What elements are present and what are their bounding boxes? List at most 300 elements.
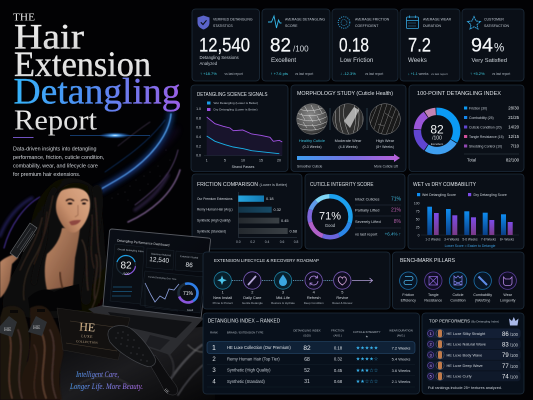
panel: morphology study: More Cuticle Lift (374, 164, 398, 168)
row 2: Remy Human Hair (Top Tier) (227, 356, 280, 361)
KPI card: verified statistics: Detangling Sessions (200, 55, 239, 60)
row 4: ★★☆☆☆ (356, 379, 379, 385)
screen ring (116, 256, 136, 274)
panel: wet vs dry combability: Lower Score = Easier to Detangle (445, 244, 496, 248)
roadmap node: new install: New Install (213, 295, 232, 300)
panel: friction comparison: 0.8 (294, 240, 298, 244)
hair brush: HE (163, 387, 171, 395)
intro paragraph: Data-driven insights into detangling (13, 146, 97, 152)
panel: benchmark pillars: BENCHMARK PILLARS (400, 258, 456, 264)
axes: 5 (224, 158, 226, 162)
row 3: Synthetic (High Quality) (227, 368, 271, 373)
panel: wet vs dry combability: 0 (418, 234, 420, 238)
axes: 1.0 (196, 107, 201, 111)
panel: top performers: Full rankings include 25+ textures analyzed. (428, 386, 502, 390)
table header: BRAND / EXTENSION TYPE (227, 330, 263, 334)
legend rows: Combability (25) (469, 116, 494, 120)
laptop (88, 229, 211, 355)
row 1: 7.2 Weeks (392, 346, 410, 350)
title: Detangling (14, 70, 181, 112)
luxe product box (57, 308, 130, 360)
KPI card: wear duration: AVERAGE WEAR (423, 18, 452, 22)
integrity rows: 8% (394, 219, 402, 225)
panel: friction comparison: 0.45 (281, 218, 289, 223)
KPI card: friction coefficient: ↓ -12.3% (340, 71, 356, 76)
KPI card: satisfaction: vs last report (492, 72, 510, 76)
performer row 3: 3 (430, 353, 432, 357)
wet line (207, 136, 279, 154)
KPI card: friction coefficient: AVERAGE FRICTION (355, 18, 390, 22)
panel: wet vs dry combability: 7-8 Weeks (481, 238, 496, 242)
cuticle labels: Healthy Cuticle (299, 138, 325, 143)
legend rows: 7/10 (511, 144, 520, 148)
panel: benchmark pillars (392, 252, 524, 309)
ring gauge (310, 196, 350, 237)
roadmap arrow (352, 278, 372, 283)
roadmap node: new install: 1 (222, 290, 224, 294)
roadmap node: refresh: Refresh (307, 295, 321, 300)
legend: Wet Detangling Score (422, 193, 456, 197)
cuticle labels: High Wear (376, 138, 395, 143)
bar labels: Our Premium Extensions (197, 197, 233, 201)
panel: detangling index ranked table: DETANGLING INDEX – RANKED (208, 318, 280, 324)
KPI card: friction coefficient: 0.18 (339, 34, 369, 56)
panel: cuticle integrity score: CUTICLE INTEGRITY SCORE (310, 182, 374, 188)
KPI card: friction coefficient (332, 9, 398, 81)
row 1: 1 (212, 345, 216, 352)
table header: RANK (210, 330, 218, 334)
roadmap node: revive: Revive (336, 295, 348, 300)
axes: 0.8 (196, 116, 201, 120)
panel: science signals line chart (191, 85, 288, 172)
row 4 (212, 379, 410, 385)
pillar: tangle: Resistance (424, 299, 442, 303)
hair brush (108, 326, 178, 395)
KPI card: satisfaction (462, 9, 524, 81)
pillar: combability: Combability (473, 293, 492, 297)
sparkle dust (112, 150, 170, 200)
script tagline (70, 371, 142, 391)
bars (238, 196, 264, 202)
axes: Strand Passes (232, 165, 255, 169)
table header: (AVG.) (334, 334, 342, 338)
KPI card: verified statistics (192, 9, 260, 81)
panel: wet vs dry combability: 75 (416, 210, 420, 214)
performer row 1: 1 (430, 332, 432, 336)
axes: 0.6 (196, 126, 201, 130)
performer row 5 (427, 371, 520, 381)
luxe product box: COLLECTION (76, 339, 99, 345)
row 3: 3.6 Weeks (392, 368, 410, 373)
cuticle labels (299, 138, 395, 149)
table header: FRICTION (331, 328, 344, 332)
performer row 4: 77 /100 (502, 364, 519, 370)
KPI card: satisfaction: % (494, 42, 504, 54)
KPI card: average score (262, 9, 330, 81)
panel: cuticle integrity score: 71% (319, 210, 341, 222)
panel: friction comparison: 0.0 (236, 240, 241, 244)
bundle tags: HE (33, 325, 41, 331)
row 4: 0.68 (334, 379, 343, 384)
panel: 100-point index: 100-POINT DETANGLING INDEX (417, 91, 502, 97)
roadmap node: daily care (242, 272, 263, 305)
screen line chart (145, 283, 179, 302)
performer row 2 (427, 339, 520, 349)
row 3 (212, 368, 410, 374)
KPI card: verified statistics: ↑ +18.7% (200, 71, 217, 76)
performer row 2: 83 /100 (502, 342, 519, 348)
table header: ★ (365, 334, 368, 338)
bundle tags (0, 309, 47, 337)
panel: morphology study: Smoother Cuticle (297, 164, 322, 168)
laptop: /100 (123, 272, 129, 276)
panel: lifecycle roadmap: EXTENSION LIFECYCLE & RECOVERY ROADMAP (214, 258, 319, 263)
pillar: wear (499, 272, 516, 303)
script tagline: Intelligent Care, (75, 369, 119, 379)
panel: 100-point index: Total (467, 158, 476, 162)
performer row 2: HE Luxe Natural Wave (446, 342, 486, 347)
KPI card: verified statistics: vs last report (224, 72, 243, 76)
dry line (207, 117, 282, 156)
legend: Wet Detangling (Lower is Better) (214, 101, 258, 105)
roadmap node: daily care: Daily Care (243, 295, 261, 300)
KPI card: wear duration: Weeks (408, 57, 427, 64)
legend rows: Friction (30) (469, 106, 487, 110)
table header: WEAR DURATION (389, 328, 413, 332)
performer row 1: HE Luxe Silky Straight (446, 331, 486, 336)
axes: 15 (259, 158, 263, 162)
performer row 4 (427, 360, 520, 370)
performer row 1 (427, 328, 520, 338)
facial features (66, 199, 88, 225)
row 2: 5.4 Weeks (392, 357, 410, 362)
legend rows: 28/30 (508, 106, 520, 110)
axes: 10 (241, 158, 245, 162)
highlighted row (207, 342, 415, 353)
panel: friction comparison: 0.2 (250, 240, 255, 244)
panel: 100-point index: /100 (432, 136, 442, 142)
hair bundles (0, 306, 63, 400)
table header (210, 328, 413, 338)
roadmap connectors (232, 280, 333, 282)
panel: friction comparison: 0.32 (274, 207, 281, 212)
flare (70, 132, 150, 139)
pillar: cuticle: Cuticle (452, 293, 464, 297)
table header: CUTICLE INTEGRITY (353, 330, 381, 334)
KPI card: verified statistics: 12,540 (199, 34, 250, 56)
KPI card: average score: 82 (270, 34, 291, 56)
legend rows: Tangle Resistance (15) (469, 135, 504, 139)
row 1: HE Luxe Collection (Our Premium) (227, 345, 291, 350)
panel: wet vs dry combability: 50 (416, 218, 420, 222)
performer row 3 (427, 350, 520, 360)
roadmap node: mid-life: Mid-Life (276, 295, 290, 300)
hairline (59, 183, 89, 196)
title underline (13, 136, 34, 139)
laptop base (88, 305, 204, 355)
KPI card: friction coefficient: vs last report (365, 72, 383, 76)
intro paragraph: combability, wear, and lifecycle care (13, 164, 98, 170)
panel: lifecycle roadmap (203, 252, 390, 309)
integrity rows: Partially Lifted (355, 208, 379, 212)
bar labels (197, 197, 233, 234)
KPI card: average score: /100 (293, 44, 309, 54)
face (56, 185, 90, 233)
panel: friction comparison: FRICTION COMPARISON (Lower is Better) (197, 182, 288, 188)
intro paragraph: performance, friction, cuticle condition, (13, 155, 104, 161)
roadmap node: mid-life: Restore & Hydrate (271, 301, 295, 305)
laptop: Overall Detangling Index (117, 248, 145, 253)
panel: wet vs dry combability: 25 (416, 226, 420, 230)
icon: pulse (268, 16, 282, 28)
axes: 0.2 (196, 144, 201, 148)
row 2: ★★★★☆ (356, 357, 379, 363)
row 2 (212, 356, 410, 363)
performer row 3: 79 /100 (502, 353, 519, 359)
legend rows: Cuticle Condition (20) (469, 125, 502, 129)
laptop: Extension Tested (180, 255, 199, 260)
laptop: Sessions Analyzed (151, 253, 172, 257)
panel: friction comparison (192, 174, 302, 249)
pillar: wear: Longevity (500, 299, 516, 303)
comb (10, 223, 37, 258)
arm and hand (0, 253, 18, 298)
pillar: friction: Efficiency (401, 299, 416, 303)
panel: wet vs dry combability: WET vs DRY COMBABILITY (413, 182, 477, 188)
panel: 100-point index: 82/100 (506, 158, 520, 162)
integrity rows: Intact Cuticles (355, 196, 379, 202)
row 3: 0.45 (334, 368, 343, 373)
row 2: 0.32 (334, 357, 343, 362)
bar labels: Remy Human Hair (Avg.) (197, 208, 233, 212)
panel: science signals line chart: DETANGLING SCIENCE SIGNALS (197, 92, 268, 98)
panel: cuticle integrity score: Good (325, 223, 336, 228)
laptop: 82 (120, 260, 132, 272)
pillar: combability: (Wet/Dry) (475, 299, 490, 303)
panel: 100-point index: 82 (430, 122, 444, 136)
legend: Dry Detangling (Lower is Better) (214, 108, 258, 112)
performer row 5: 74 /100 (502, 374, 519, 380)
table header: (AVG.) (397, 334, 405, 338)
pillar: wear: Wear (503, 293, 513, 297)
roadmap node: mid-life (271, 272, 295, 305)
table header: (/100) (303, 334, 311, 338)
background light streaks (0, 112, 180, 248)
legend (417, 193, 507, 197)
row 3: 52 (304, 368, 310, 374)
roadmap node: new install: Prime & Protect (213, 301, 233, 305)
performer row 5: 5 (430, 375, 432, 379)
title: Extension (14, 44, 151, 84)
donut chart (417, 111, 457, 151)
row 4: 4 (212, 379, 216, 385)
KPI card: average score: vs last report (295, 72, 313, 76)
integrity rows (355, 196, 402, 236)
roadmap node: daily care: Gentle Detangle (242, 301, 263, 305)
cuticle labels: (8+ Weeks) (376, 145, 394, 149)
roadmap node: revive: 5 (341, 290, 343, 294)
legend rows (464, 106, 520, 148)
panel: wet vs dry combability: 8+ Weeks (500, 238, 515, 242)
luxe product box: HE (79, 319, 96, 335)
panel: wet vs dry combability: 100 (414, 202, 420, 206)
panel: wet vs dry combability (408, 174, 524, 249)
laptop: 86 (185, 262, 193, 269)
pillar: tangle: Tangle (428, 293, 439, 297)
table header: DETANGLING INDEX (293, 328, 321, 332)
KPI card: average score: AVERAGE DETANGLING (285, 18, 325, 22)
title: Report (14, 106, 97, 136)
intro paragraph: for premium hair extensions. (13, 172, 80, 178)
cuticle labels: (0-3 Weeks) (302, 145, 322, 149)
panel: friction comparison: 0.6 (280, 240, 284, 244)
cuticle image: moderate (333, 104, 363, 137)
KPI card: average score: ↑ +7.6 pts (270, 71, 288, 76)
row 1: 0.18 (334, 346, 343, 350)
bars (427, 207, 513, 235)
panel: top performers (422, 313, 524, 394)
row 4: 31 (304, 379, 310, 385)
panel: morphology study: MORPHOLOGY STUDY (Cuticle Health) (297, 91, 393, 97)
roadmap node: refresh (304, 272, 324, 305)
integrity rows: vs last report (355, 232, 378, 236)
KPI card: average score: Excellent (271, 57, 296, 64)
icon: friction ring (338, 17, 350, 28)
back hair (3, 178, 108, 318)
legend: Dry Detangling Score (474, 193, 507, 197)
panel: friction comparison: 0.18 (266, 196, 274, 201)
pillar: friction (400, 272, 417, 303)
performer row 2: 2 (430, 343, 432, 347)
axes: 20 (277, 158, 281, 162)
integrity rows: +6.4% ↑ (385, 232, 401, 236)
bar labels: Synthetic (Standard) (197, 230, 226, 234)
screen gauge (178, 284, 198, 302)
icon: crown (509, 317, 518, 326)
pillar: combability (473, 272, 492, 303)
icon: calendar (406, 16, 418, 28)
panel: top performers: TOP PERFORMERS (By Detangling Index) (429, 318, 499, 324)
KPI card: satisfaction: ↑ +5.2% (470, 71, 485, 76)
performer row 5: HE Luxe Curly (446, 374, 472, 379)
axes (196, 107, 281, 169)
axes: 0.4 (196, 135, 201, 139)
KPI card: wear duration: DURATION (423, 24, 441, 28)
chest shadow (60, 272, 63, 290)
cuticle image: high wear (370, 104, 400, 135)
row 1: 82 (303, 345, 311, 352)
panel: 100-point index (409, 85, 524, 172)
integrity rows: 21% (391, 208, 402, 214)
KPI card: satisfaction: CUSTOMER (484, 18, 504, 22)
black top (28, 284, 82, 312)
panel: friction comparison: 0.4 (265, 240, 269, 244)
cuticle labels: (4-8 Weeks) (338, 145, 358, 149)
KPI card: satisfaction: Very Satisfied (472, 58, 507, 64)
panel: wet vs dry combability: 5-6 Weeks (462, 238, 478, 242)
integrity rows: Severely Lifted (355, 219, 381, 224)
KPI card: verified statistics: STATISTICS (213, 24, 233, 28)
pillar: tangle (424, 272, 442, 303)
cuticle image: healthy (297, 104, 328, 134)
row 1: ★★★★★ (356, 346, 379, 352)
row 2: 68 (304, 357, 310, 363)
script tagline: Longer Life. More Beauty. (69, 381, 143, 391)
intro paragraph (13, 146, 104, 178)
neck and chest (45, 228, 80, 290)
panel: 100-point index: Excellent (431, 142, 443, 146)
performer row 4: 4 (430, 364, 432, 368)
roadmap node: revive: Reset & Renew (332, 301, 353, 305)
KPI card: wear duration: vs last report (431, 72, 448, 76)
performer row 3: HE Luxe Body Wave (446, 352, 482, 357)
laptop: 12,540 (149, 256, 170, 265)
icon: shield (198, 16, 210, 30)
pillar: cuticle: Condition (450, 299, 466, 303)
laptop: Detangling Performance Dashboard (117, 239, 170, 247)
gradient arrow (297, 154, 400, 162)
KPI card: friction coefficient: COEFFICIENT (355, 24, 379, 28)
legend rows: 21/25 (508, 115, 520, 120)
title (13, 12, 181, 136)
row 4: Synthetic (Standard) (227, 379, 265, 384)
roadmap node: refresh: 4 (313, 290, 316, 294)
pillar: friction: Friction (402, 293, 414, 297)
row 4: 2.1 Weeks (392, 379, 410, 384)
panel: wet vs dry combability: 3-4 Weeks (444, 238, 460, 242)
pillar: cuticle (449, 272, 467, 303)
performer row 1: 86 /100 (502, 332, 519, 338)
integrity rows: 71% (391, 196, 402, 202)
bundle tags: HE (4, 327, 12, 333)
laptop: Trends Detangling Over Time (148, 276, 177, 281)
roadmap node: new install (213, 272, 233, 305)
screen cards (110, 244, 206, 313)
KPI card: wear duration: 7.2 (408, 34, 431, 56)
KPI card: friction coefficient: Low Friction (340, 57, 374, 64)
performer row 4: HE Luxe Deep Wave (446, 363, 483, 368)
front hair locks (20, 190, 100, 308)
row 2: 2 (212, 357, 216, 363)
roadmap node: mid-life: 3 (282, 290, 284, 294)
row 1 (212, 345, 410, 352)
title: THE (13, 12, 35, 24)
row 3: 3 (212, 368, 216, 374)
legend (207, 101, 258, 112)
panel: morphology study (291, 85, 406, 172)
roadmap node: refresh: Deep Condition (304, 301, 324, 305)
bar labels: Synthetic (High Quality) (197, 219, 230, 223)
KPI card: satisfaction: 94 (471, 34, 493, 56)
title: Hair (14, 16, 84, 56)
roadmap node: revive (332, 272, 353, 305)
KPI card: verified statistics: Analyzed (200, 61, 218, 66)
axes: 1 (206, 158, 208, 162)
legend rows: 14/20 (508, 124, 520, 130)
silk fabric (60, 325, 215, 400)
axes: 0.0 (196, 154, 201, 158)
laptop screen (103, 229, 211, 318)
laptop: 71% (183, 291, 194, 297)
KPI card: average score: SCORE (285, 24, 298, 28)
laptop: Good (187, 308, 194, 312)
panel: detangling index ranked table (203, 313, 420, 394)
row 3: ★★★☆☆ (356, 368, 379, 374)
KPI card: verified statistics: VERIFIED DETANGLING (213, 18, 253, 22)
legend rows: 12/15 (508, 134, 520, 139)
cuticle labels: Moderate Wear (335, 138, 362, 143)
legend rows: Shedding Control (10) (469, 144, 502, 148)
